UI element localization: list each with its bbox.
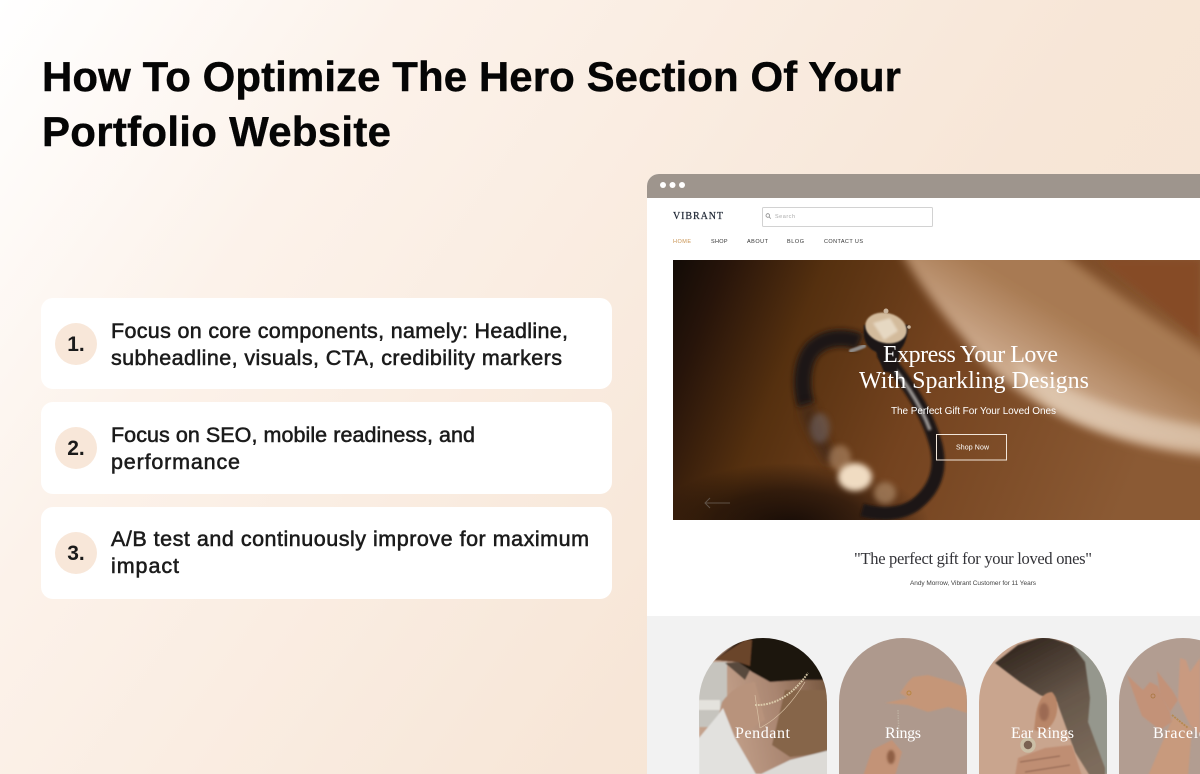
- category: pendant: [695, 636, 830, 774]
- icon: left arrow: [705, 498, 730, 508]
- browser title bar: [647, 174, 1200, 198]
- navigation: BLOG: [787, 239, 804, 245]
- card 1: [41, 298, 612, 389]
- hero copy: The Perfect Gift For Your Loved Ones: [891, 406, 1056, 417]
- hero copy: Express Your Love: [883, 342, 1058, 368]
- logo: VIBRANT: [673, 211, 723, 222]
- title: Portfolio Website: [42, 108, 391, 155]
- ring band: [803, 338, 860, 405]
- diamond: [864, 325, 908, 372]
- card 1: 1.: [67, 333, 85, 356]
- panel: tips list: [41, 298, 612, 599]
- navigation: HOME: [673, 239, 691, 245]
- card 2: [41, 402, 612, 494]
- navigation: CONTACT US: [824, 239, 863, 245]
- card 3: [41, 507, 612, 599]
- hero image: [673, 260, 1200, 520]
- card 3: A/B test and continuously improve for maximum: [111, 527, 589, 551]
- button: shop now: Shop Now: [956, 444, 990, 452]
- category: rings: Rings: [885, 725, 921, 742]
- hero copy: With Sparkling Designs: [859, 368, 1089, 394]
- search box: Search: [775, 214, 795, 220]
- testimonial quote: "The perfect gift for your loved ones": [854, 549, 1092, 568]
- card 3: 3.: [67, 542, 85, 565]
- category: bracelets: [1119, 638, 1200, 774]
- card 2: 2.: [67, 437, 85, 460]
- category: pendant: Pendant: [735, 725, 791, 742]
- hero copy: [859, 342, 1089, 417]
- category: ear rings: [979, 636, 1110, 774]
- title: How To Optimize The Hero Section Of Your: [42, 53, 901, 100]
- category: rings: [839, 638, 967, 774]
- title: [42, 53, 901, 155]
- bokeh reflections: [810, 413, 830, 443]
- navigation: ABOUT: [747, 239, 769, 245]
- card 1: subheadline, visuals, CTA, credibility markers: [111, 346, 562, 370]
- search box: [762, 208, 932, 226]
- testimonial quote: [854, 549, 1092, 587]
- category section: [647, 616, 1200, 774]
- card 3: impact: [111, 554, 179, 578]
- navigation: [673, 239, 863, 245]
- button: shop now: [936, 434, 1006, 460]
- card 1: Focus on core components, namely: Headline,: [111, 319, 568, 343]
- panel: browser mockup: [647, 174, 1200, 774]
- card 2: Focus on SEO, mobile readiness, and: [111, 423, 475, 447]
- navigation: SHOP: [711, 239, 728, 245]
- card 2: performance: [111, 450, 240, 474]
- testimonial quote: Andy Morrow, Vibrant Customer for 11 Years: [910, 580, 1037, 587]
- browser window: [647, 174, 1200, 774]
- category: ear rings: Ear Rings: [1011, 725, 1074, 742]
